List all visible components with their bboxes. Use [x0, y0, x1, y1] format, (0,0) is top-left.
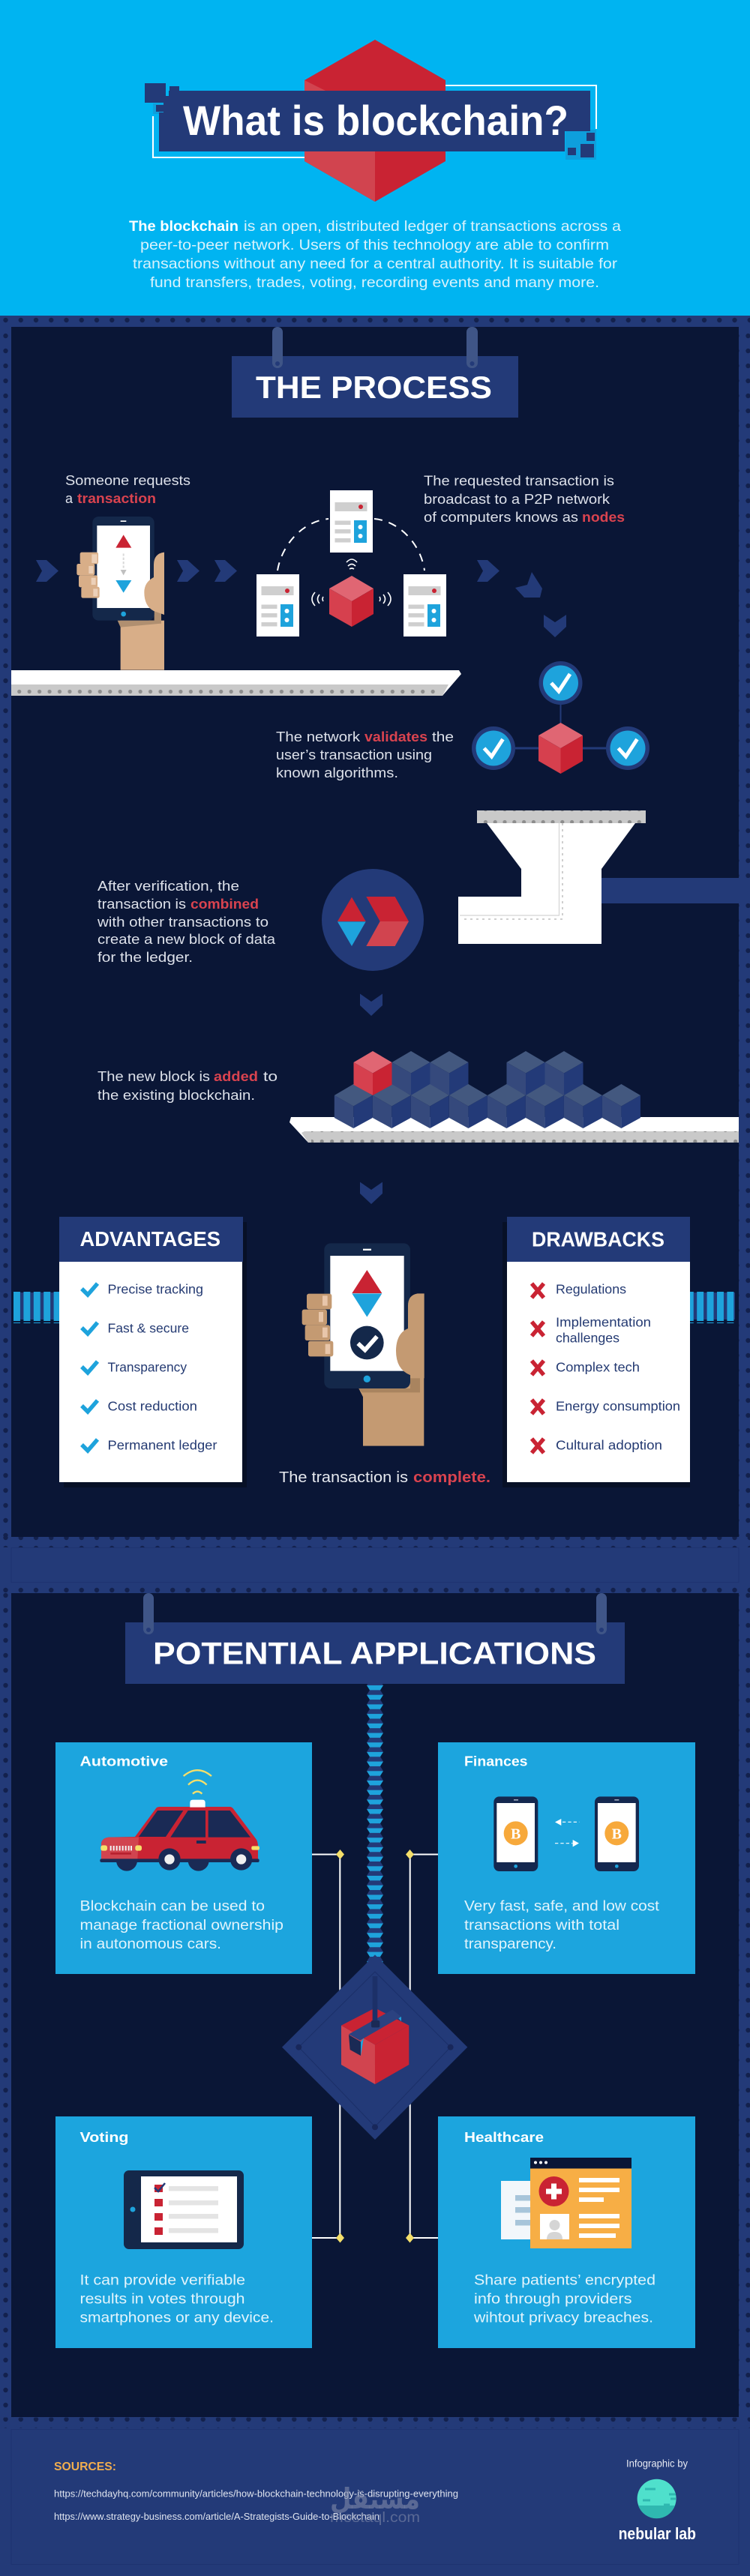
sources [54, 2461, 458, 2522]
card text [464, 1898, 660, 1952]
sources: SOURCES: [54, 2461, 116, 2473]
icon: patient record [501, 2158, 632, 2248]
card text: transactions with total [464, 1918, 620, 1933]
conveyor 1 [11, 670, 461, 696]
text: someone requests: Someone requests [65, 472, 190, 488]
sources: https://www.strategy-business.com/article/A-Strategists-Guide-to-Blockchain [54, 2511, 380, 2522]
icon: tablet ballot [124, 2170, 244, 2249]
text: complete: The transaction is [279, 1469, 408, 1486]
watermark [330, 2482, 420, 2526]
heading: potential applications: POTENTIAL APPLICATIONS [153, 1635, 596, 1670]
text: broadcast: The requested transaction is [424, 472, 614, 489]
list [108, 1282, 218, 1453]
text: combined: create a new block of data [98, 931, 276, 947]
list: Permanent ledger [108, 1438, 218, 1453]
list: Precise tracking [108, 1282, 203, 1297]
text: combined [97, 878, 276, 965]
logo planet [638, 2479, 676, 2518]
red cube [538, 723, 583, 774]
card: automotive [56, 1742, 312, 1974]
card: voting [56, 2116, 312, 2348]
panel: drawbacks [502, 1217, 690, 1487]
chain [367, 1684, 383, 1976]
x icons [532, 1284, 544, 1453]
icon: phones exchanging bitcoin: B [612, 1826, 622, 1843]
text: combined: transaction is [98, 896, 186, 912]
banner outline [153, 85, 596, 157]
list: Regulations [556, 1282, 626, 1297]
heading: the process [232, 327, 518, 418]
text: combined: for the ledger. [98, 949, 193, 965]
title: What is blockchain? [183, 97, 568, 144]
watermark: مستقل [330, 2482, 420, 2515]
lower cubes [334, 1084, 640, 1128]
intro text: The blockchain [129, 218, 238, 235]
card text [80, 2272, 274, 2326]
text: broadcast: nodes [582, 509, 625, 525]
credit: nebular lab [619, 2458, 696, 2543]
text: broadcast: broadcast to a P2P network [424, 491, 610, 507]
validation diagram [472, 661, 650, 774]
list: Transparency [108, 1360, 187, 1375]
card text: Blockchain can be used to [80, 1898, 265, 1915]
list: Cultural adoption [556, 1438, 662, 1453]
text: combined: After verification, the [98, 878, 239, 894]
check circle left [472, 726, 515, 770]
icon: phones exchanging bitcoin [494, 1796, 639, 1871]
card text: transparency. [464, 1936, 556, 1952]
icon: hand with phone check [302, 1243, 424, 1446]
text: added: to [263, 1068, 278, 1084]
card text: wihtout privacy breaches. [473, 2310, 653, 2326]
text: someone requests [65, 472, 190, 506]
icon: phones exchanging bitcoin: B [511, 1826, 520, 1843]
check circle right [606, 726, 650, 770]
text: complete [279, 1469, 490, 1486]
text: added: added [214, 1068, 258, 1084]
sources: https://techdayhq.com/community/articles/how-blockchain-technology-is-disrupting-everything [54, 2488, 458, 2500]
text: broadcast: of computers knows as [424, 509, 578, 525]
card title: Finances [464, 1754, 528, 1769]
header background [0, 0, 750, 316]
credit: nebular lab: Infographic by [626, 2458, 688, 2470]
panel: advantages [59, 1217, 247, 1487]
network diagram: nodes [256, 490, 446, 637]
node card top [330, 490, 373, 553]
heading: DRAWBACKS [532, 1227, 664, 1251]
intro text: fund transfers, trades, voting, recording events and many more. [150, 274, 599, 291]
node card right [404, 574, 446, 637]
card text: in autonomous cars. [80, 1936, 221, 1952]
list [556, 1282, 680, 1453]
card title: Healthcare [464, 2129, 544, 2145]
card text: manage fractional ownership [80, 1918, 284, 1933]
watermark: mostaql.com [330, 2510, 420, 2526]
heading: the process: THE PROCESS [256, 370, 492, 405]
pixel squares bottom right [568, 133, 595, 157]
card text [473, 2272, 656, 2326]
card title: Voting [80, 2129, 129, 2145]
text: validates: validates [364, 729, 428, 744]
intro text: peer-to-peer network. Users of this technology are able to confirm [140, 237, 609, 253]
text: combined: combined [190, 896, 259, 912]
springs beside panels [14, 1292, 735, 1323]
icon: combine circle [322, 869, 424, 971]
text: validates: the [432, 729, 454, 744]
list: Cost reduction [108, 1399, 197, 1414]
wireless signals [312, 559, 391, 606]
card: healthcare [438, 2116, 695, 2348]
funnel conveyor [458, 810, 750, 944]
icon: hand holding phone [76, 517, 164, 670]
text: validates: The network [276, 729, 361, 744]
list: Complex tech [556, 1360, 640, 1375]
title group: hexagon, banner and pixel squares [142, 40, 596, 202]
central diamond with block [282, 1954, 467, 2140]
check circle top [538, 661, 582, 705]
text: someone requests: transaction [77, 490, 156, 506]
text: combined: with other transactions to [97, 914, 268, 930]
heading: ADVANTAGES [80, 1227, 220, 1251]
text: validates: user’s transaction using [276, 747, 432, 762]
card text: info through providers [474, 2291, 632, 2308]
list: Fast & secure [108, 1321, 189, 1336]
red cube [329, 576, 374, 627]
card title: Automotive [80, 1754, 168, 1769]
card: finances [438, 1742, 695, 1974]
conveyor 2 [290, 1117, 739, 1143]
check icons [82, 1284, 98, 1451]
upper cubes [392, 1051, 584, 1095]
text: broadcast [424, 472, 625, 525]
card text: Very fast, safe, and low cost [464, 1898, 660, 1915]
node card left [256, 574, 299, 637]
intro text: transactions without any need for a central authority. It is suitable for [133, 256, 618, 272]
text: added: The new block is [98, 1068, 210, 1084]
credit: nebular lab: nebular lab [619, 2524, 696, 2543]
banner [159, 91, 590, 151]
card text: smartphones or any device. [80, 2310, 274, 2326]
icon: car [100, 1770, 260, 1871]
list: Energy consumption [556, 1399, 680, 1414]
text: validates: known algorithms. [276, 765, 398, 780]
pixel squares [142, 80, 596, 160]
text: validates [276, 729, 454, 780]
card text: Share patients’ encrypted [474, 2272, 656, 2288]
arrow down [360, 994, 382, 1016]
card text: results in votes through [80, 2291, 244, 2308]
text: someone requests: a [65, 490, 74, 506]
card text: It can provide verifiable [80, 2272, 245, 2288]
text: added [98, 1068, 278, 1103]
red hexagon [304, 40, 446, 202]
arrow down [360, 1182, 382, 1204]
list: challenges [556, 1331, 620, 1346]
text: added: the existing blockchain. [98, 1087, 255, 1103]
block stack [334, 1051, 640, 1128]
heading: potential applications [125, 1593, 625, 1684]
list: Implementation [556, 1315, 651, 1330]
text: complete: complete. [413, 1469, 490, 1486]
new red block [354, 1051, 392, 1095]
intro text: is an open, distributed ledger of transactions across a [244, 218, 621, 235]
card text [80, 1898, 284, 1952]
intro text [129, 218, 621, 291]
arrow chevrons [36, 560, 566, 637]
connector lines [312, 1850, 438, 2243]
